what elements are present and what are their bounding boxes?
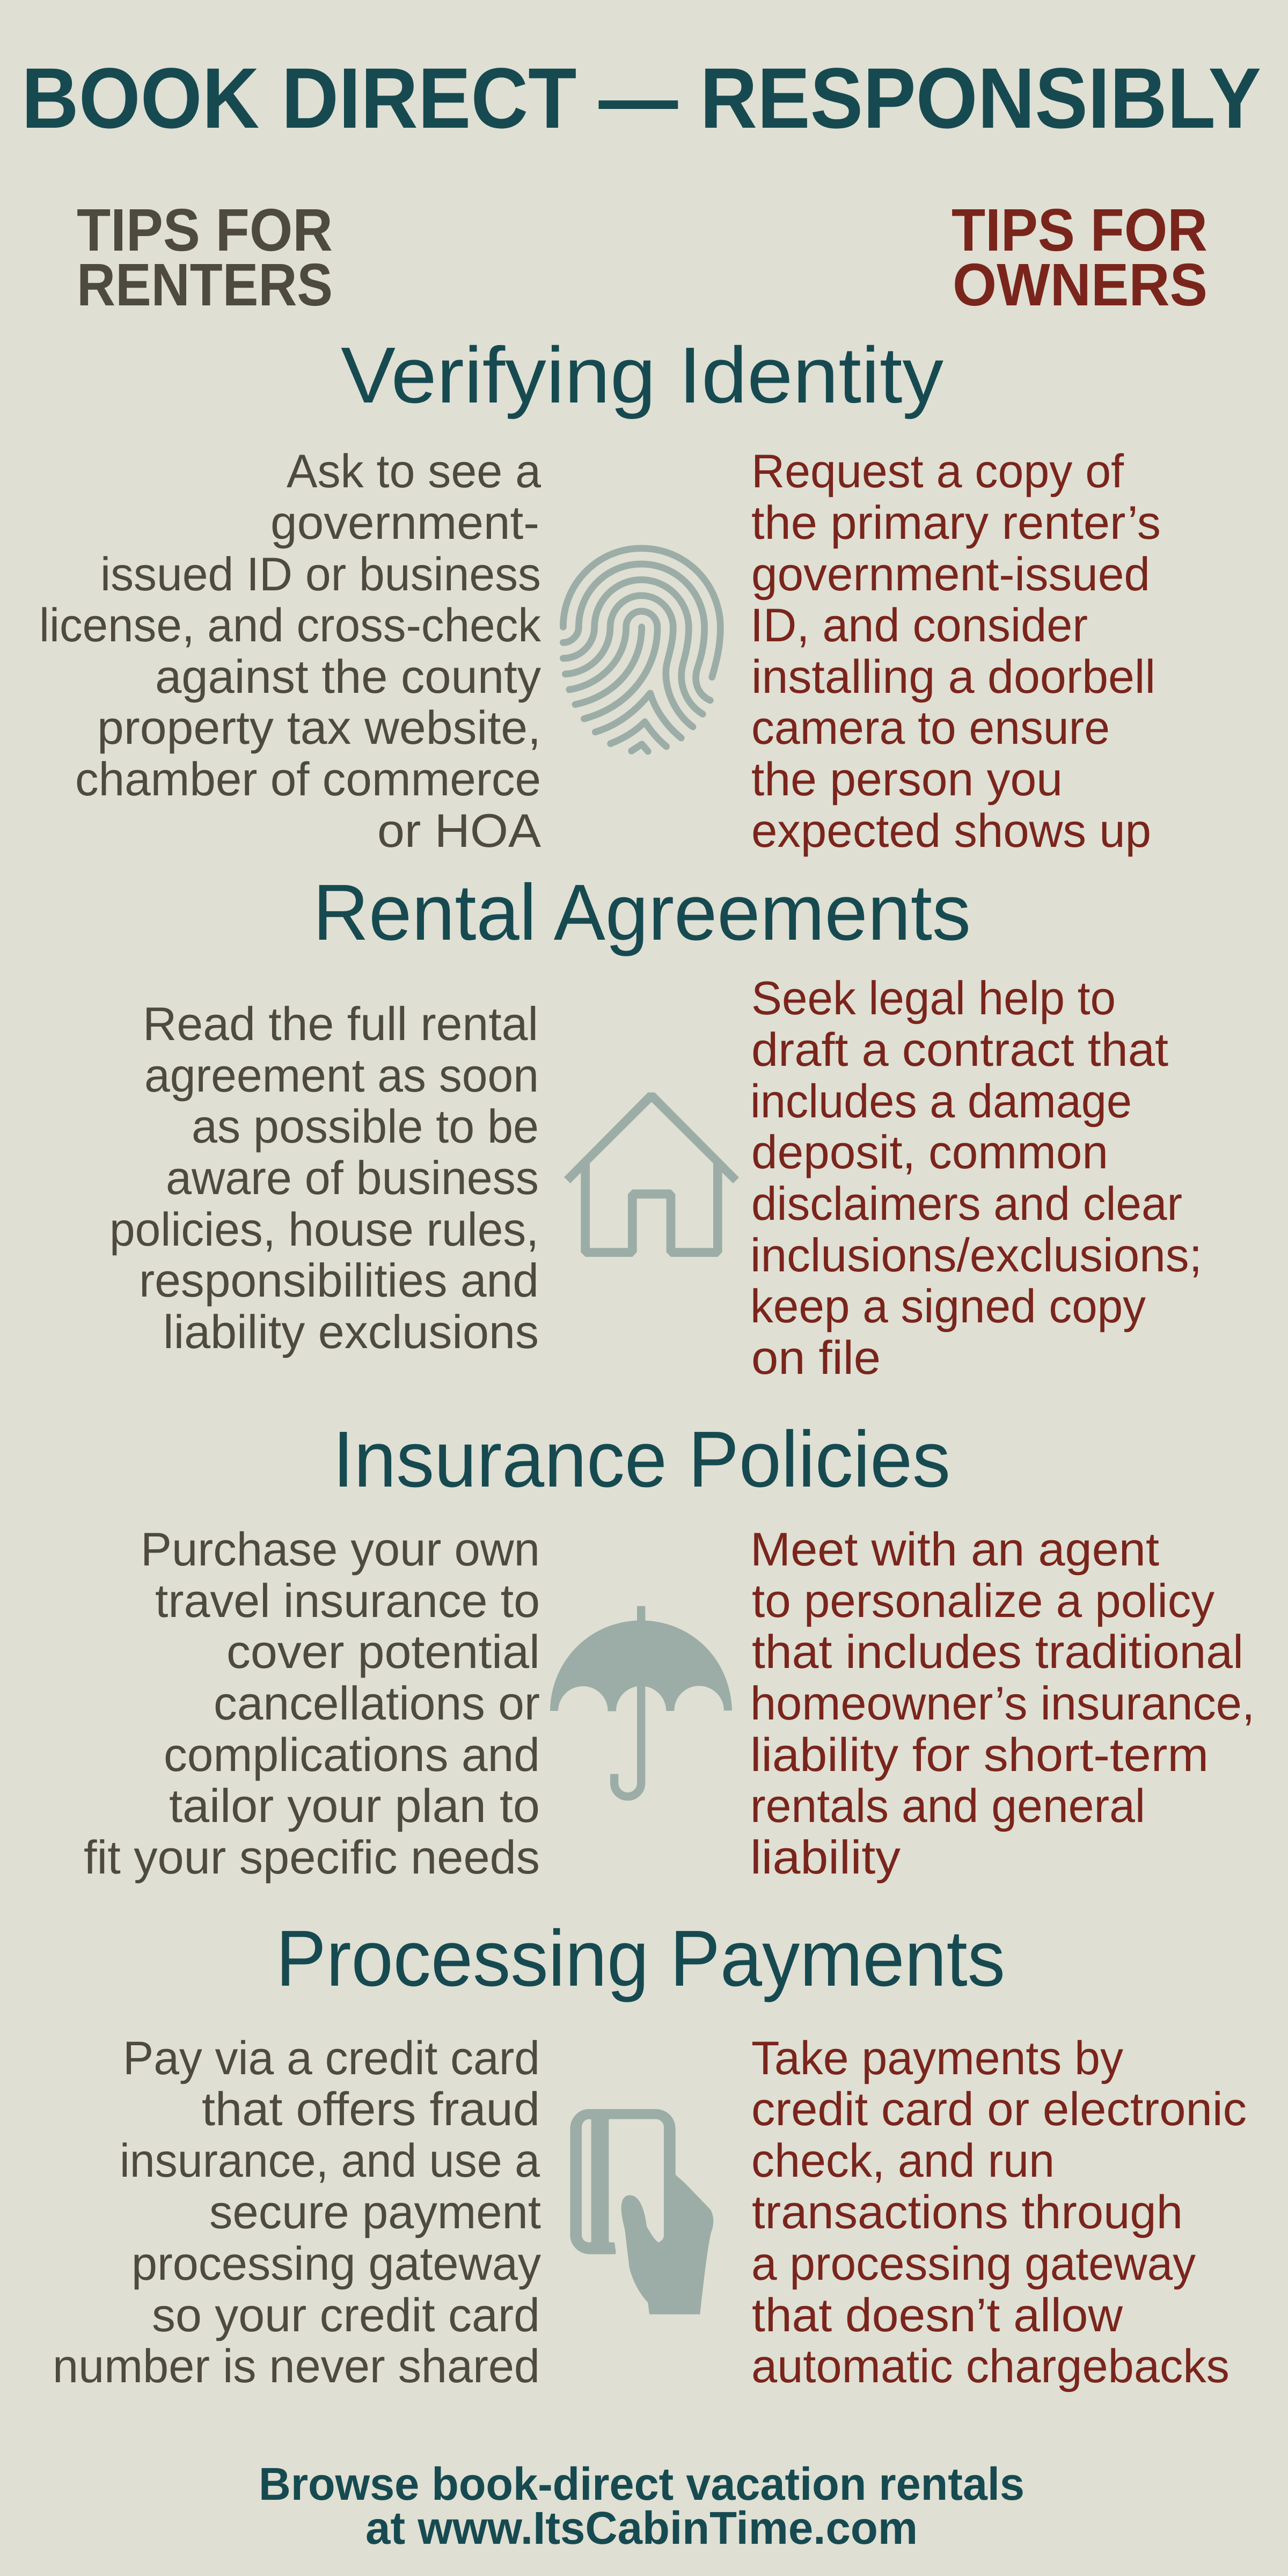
text block: owners insurance policies: homeowner’s insurance,	[750, 1677, 1255, 1730]
heading: processing payments: Processing Payments	[276, 1914, 1005, 2003]
text block: renters rental agreements: as possible to be	[192, 1100, 539, 1153]
text block: renters processing payments: secure payment	[209, 2185, 541, 2238]
text block: owners processing payments: transactions through	[752, 2185, 1183, 2238]
text block: renters rental agreements	[109, 997, 539, 1358]
text block: renters insurance policies: tailor your plan to	[169, 1779, 540, 1832]
text block: owners verifying identity	[750, 444, 1161, 857]
text block: owners insurance policies: Meet with an agent	[750, 1523, 1159, 1576]
panel: insurance policies	[84, 1415, 1255, 1884]
text block: renters rental agreements: agreement as soon	[144, 1049, 539, 1102]
text block: owners rental agreements: includes a damage	[750, 1074, 1132, 1128]
footer call to action: at www.ItsCabinTime.com	[365, 2502, 918, 2554]
heading: rental agreements: Rental Agreements	[313, 868, 971, 957]
text block: owners verifying identity: the primary renter’s	[751, 496, 1161, 549]
text block: renters rental agreements: aware of business	[166, 1151, 539, 1204]
text block: owners rental agreements: keep a signed copy	[750, 1279, 1146, 1333]
footer call to action	[259, 2458, 1024, 2554]
panel: processing payments	[53, 1914, 1247, 2392]
text block: owners insurance policies: liability	[750, 1831, 901, 1884]
text block: owners rental agreements: deposit, common	[751, 1125, 1108, 1179]
text block: renters verifying identity: chamber of commerce	[75, 752, 541, 806]
text block: renters processing payments: insurance, and use a	[120, 2134, 540, 2187]
text block: owners rental agreements: disclaimers and clear	[751, 1177, 1182, 1230]
text block: owners processing payments: check, and run	[751, 2134, 1055, 2187]
text block: owners verifying identity: expected shows up	[751, 804, 1151, 857]
text block: renters insurance policies: Purchase your own	[141, 1523, 540, 1576]
text block: owners insurance policies	[750, 1523, 1255, 1884]
text block: renters verifying identity: property tax website,	[97, 701, 541, 754]
text block: owners verifying identity: camera to ensure	[751, 701, 1110, 754]
text block: renters insurance policies: cancellations or	[214, 1677, 540, 1730]
text block: owners insurance policies: that includes traditional	[752, 1625, 1243, 1678]
text block: owners rental agreements: Seek legal help to	[751, 971, 1116, 1024]
icon: fingerprint	[563, 548, 720, 751]
text block: owners insurance policies: rentals and general	[750, 1779, 1145, 1832]
heading: verifying identity: Verifying Identity	[341, 331, 943, 420]
text block: owners verifying identity: installing a doorbell	[751, 650, 1155, 703]
panel: verifying identity	[39, 331, 1161, 857]
text block: owners processing payments: a processing gateway	[751, 2237, 1196, 2290]
column heading: tips for renters	[77, 196, 333, 318]
heading: insurance policies: Insurance Policies	[333, 1415, 950, 1504]
column heading: tips for renters: TIPS FOR	[77, 196, 333, 264]
text block: owners processing payments: Take payments by	[751, 2031, 1123, 2084]
text block: owners verifying identity: the person you	[751, 752, 1063, 806]
text block: renters rental agreements: policies, house rules,	[109, 1203, 539, 1256]
column heading: tips for renters: RENTERS	[77, 251, 333, 318]
text block: renters processing payments: so your credit card	[152, 2288, 540, 2341]
text block: renters verifying identity: issued ID or business	[100, 547, 541, 601]
text block: renters processing payments	[53, 2031, 541, 2392]
text block: owners rental agreements	[750, 971, 1202, 1384]
column heading: tips for owners	[952, 196, 1208, 318]
footer call to action: Browse book-direct vacation rentals	[259, 2458, 1024, 2510]
text block: owners processing payments	[751, 2031, 1247, 2392]
text block: renters verifying identity: license, and cross-check	[39, 598, 541, 652]
text block: owners verifying identity: Request a copy of	[751, 444, 1124, 497]
text block: owners rental agreements: on file	[751, 1331, 881, 1384]
text block: renters processing payments: number is never shared	[53, 2339, 540, 2392]
panel: rental agreements	[109, 868, 1202, 1384]
icon: hand holding credit card	[570, 2109, 713, 2314]
text block: renters rental agreements: responsibilities and	[139, 1254, 539, 1307]
text block: renters insurance policies: cover potential	[226, 1625, 540, 1678]
text block: renters insurance policies: travel insurance to	[155, 1574, 540, 1627]
text block: owners insurance policies: to personalize a policy	[752, 1574, 1214, 1627]
text block: owners processing payments: credit card or electronic	[751, 2082, 1247, 2135]
text block: renters verifying identity	[39, 444, 541, 857]
icon: umbrella	[550, 1606, 732, 1797]
column heading: tips for owners: OWNERS	[953, 251, 1208, 318]
text block: renters verifying identity: Ask to see a	[287, 444, 541, 497]
text block: owners rental agreements: inclusions/exclusions;	[750, 1228, 1202, 1282]
icon: house	[564, 1093, 739, 1257]
text block: owners processing payments: that doesn’t allow	[752, 2288, 1123, 2341]
text block: renters verifying identity: against the county	[155, 650, 541, 703]
text block: renters processing payments: processing gateway	[131, 2237, 541, 2290]
text block: renters processing payments: that offers fraud	[202, 2082, 540, 2135]
text block: owners rental agreements: draft a contract that	[751, 1023, 1168, 1076]
text block: renters insurance policies: fit your specific needs	[84, 1831, 540, 1884]
text block: owners processing payments: automatic chargebacks	[751, 2339, 1230, 2392]
text block: renters rental agreements: liability exclusions	[163, 1305, 539, 1358]
text block: renters verifying identity: government-	[270, 496, 539, 549]
text block: owners verifying identity: government-issued	[751, 547, 1150, 601]
text block: renters rental agreements: Read the full rental	[143, 997, 538, 1050]
text block: renters processing payments: Pay via a credit card	[123, 2031, 540, 2084]
text block: owners verifying identity: ID, and consider	[750, 598, 1088, 652]
text block: renters insurance policies	[84, 1523, 540, 1884]
text block: renters verifying identity: or HOA	[377, 804, 541, 857]
text block: owners insurance policies: liability for short-term	[750, 1728, 1209, 1781]
column heading: tips for owners: TIPS FOR	[952, 196, 1208, 264]
text block: renters insurance policies: complications and	[164, 1728, 540, 1781]
